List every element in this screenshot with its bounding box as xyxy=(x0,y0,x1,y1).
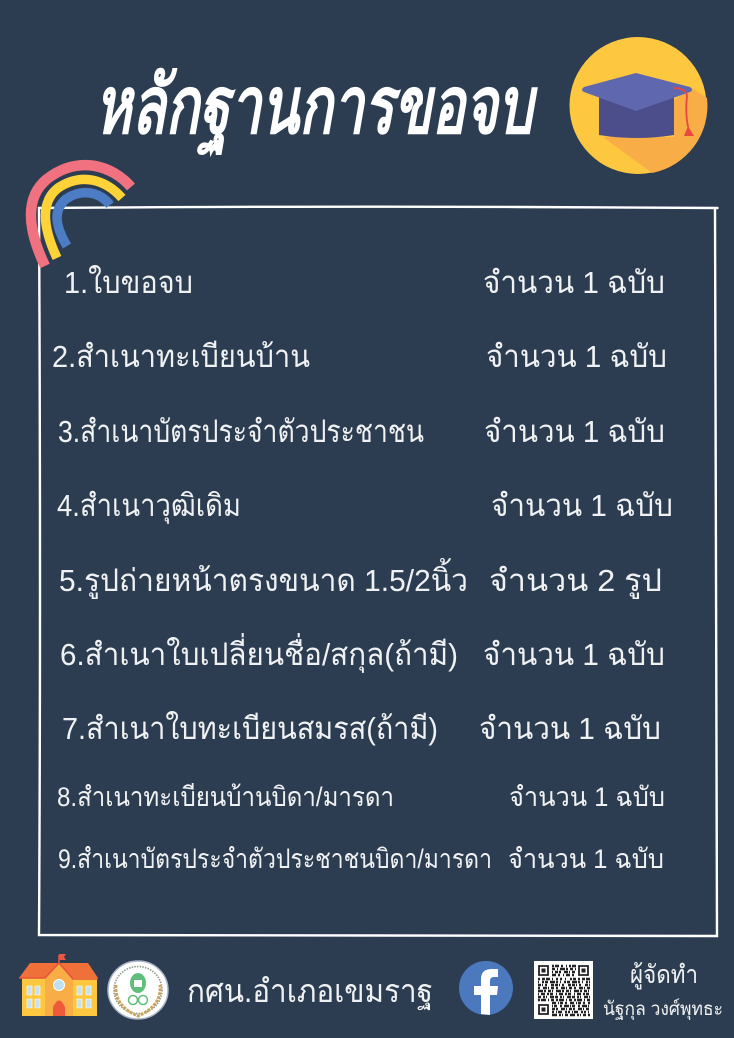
list item 5: 5.รูปถ่ายหน้าตรงขนาด 1.5/2นิ้ว xyxy=(59,558,468,599)
list item 4 xyxy=(57,488,673,525)
credit: organiser name: นัฐกุล วงศ์พุทธะ xyxy=(603,998,723,1021)
list item 1: จำนวน 1 ฉบับ xyxy=(483,265,665,300)
list item 7: จำนวน 1 ฉบับ xyxy=(479,711,661,746)
list item 1: 1.ใบขอจบ xyxy=(64,265,193,300)
list item 8: จำนวน 1 ฉบับ xyxy=(509,782,665,812)
list item 9: จำนวน 1 ฉบับ xyxy=(508,844,664,874)
list item 6: จำนวน 1 ฉบับ xyxy=(483,637,665,672)
list item 6: 6.สำเนาใบเปลี่ยนชื่อ/สกุล(ถ้ามี) xyxy=(60,633,458,674)
footer organisation name: กศน.อำเภอเขมราฐ xyxy=(187,973,433,1011)
list item 4: จำนวน 1 ฉบับ xyxy=(491,488,673,523)
list item 5: จำนวน 2 รูป xyxy=(489,563,662,599)
QR code xyxy=(534,961,593,1019)
list item 5 xyxy=(59,558,662,599)
icon: emblem xyxy=(108,961,168,1019)
icon: graduation cap badge xyxy=(570,37,707,174)
list item 8 xyxy=(57,782,665,812)
credit: organiser heading: ผู้จัดทำ xyxy=(630,961,698,990)
list item 3: จำนวน 1 ฉบับ xyxy=(484,414,665,449)
list item 8: 8.สำเนาทะเบียนบ้านบิดา/มารดา xyxy=(57,782,394,812)
list item 7 xyxy=(62,711,661,746)
list item 6 xyxy=(60,633,665,674)
list item 2: จำนวน 1 ฉบับ xyxy=(486,339,667,374)
list item 4: 4.สำเนาวุฒิเดิม xyxy=(57,488,241,525)
icon: rainbow xyxy=(31,165,131,266)
list item 2 xyxy=(52,339,667,374)
icon: school building xyxy=(19,954,98,1016)
list item 9: 9.สำเนาบัตรประจำตัวประชาชนบิดา/มารดา xyxy=(58,844,492,874)
icon: facebook xyxy=(459,961,513,1015)
list item 1 xyxy=(64,265,665,300)
list item 7: 7.สำเนาใบทะเบียนสมรส(ถ้ามี) xyxy=(62,711,438,746)
title: หลักฐานการขอจบ xyxy=(95,61,538,158)
list item 2: 2.สำเนาทะเบียนบ้าน xyxy=(52,339,310,374)
list item 3: 3.สำเนาบัตรประจำตัวประชาชน xyxy=(58,414,424,449)
frame panel xyxy=(39,207,718,936)
